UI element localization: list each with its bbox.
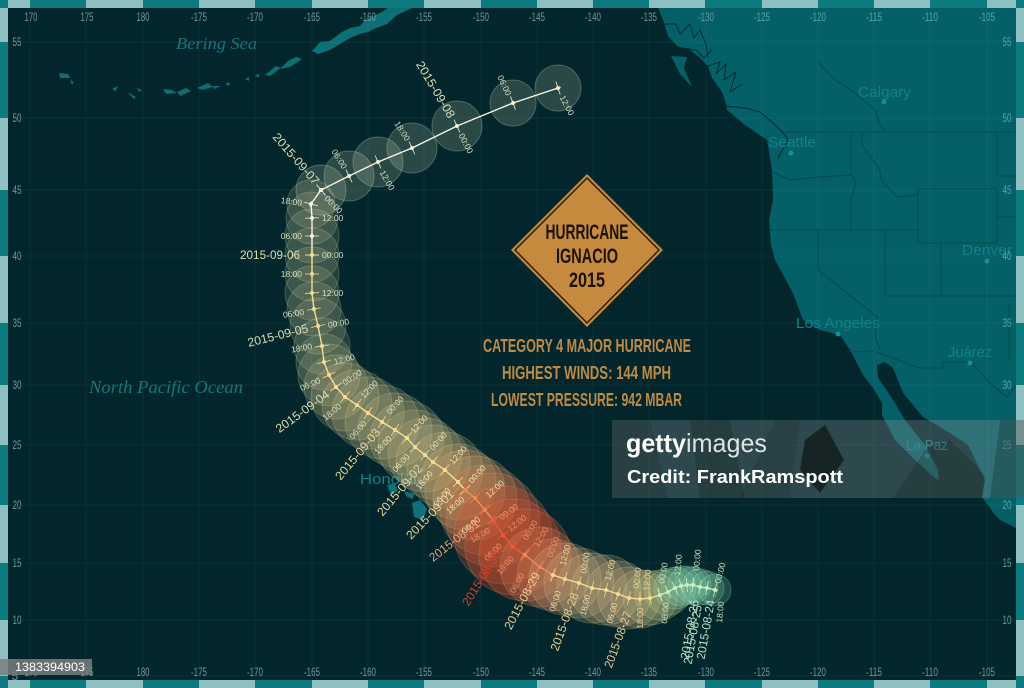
axis labels: longitude bottom: -105: [979, 665, 995, 679]
axis labels: longitude bottom: -175: [191, 665, 207, 679]
axis labels: longitude bottom: -130: [698, 665, 714, 679]
axis labels: longitude bottom: 180: [136, 665, 150, 679]
date labels along the track: 2015-08-30: [459, 548, 504, 608]
watermark credit: Credit: FrankRamspott: [627, 467, 843, 487]
axis labels: latitude right: 35: [1002, 316, 1012, 330]
storm statistics text block: CATEGORY 4 MAJOR HURRICANE: [483, 336, 691, 356]
axis labels: longitude top: -170: [247, 10, 263, 24]
time labels along the track: 06:00: [604, 601, 620, 625]
time labels along the track: 18:00: [444, 494, 467, 516]
image ID badge: [0, 659, 92, 675]
time labels along the track: 12:00: [322, 213, 344, 223]
watermark banner: [612, 420, 1024, 498]
axis labels: longitude bottom: 175: [80, 665, 94, 679]
axis labels: longitude top: -140: [585, 10, 601, 24]
date labels along the track: 2015-08-26: [678, 598, 702, 660]
time labels along the track: 06:00: [459, 514, 482, 536]
date labels along the track: 2015-09-06: [240, 248, 300, 262]
map: state and national borders: [770, 62, 1016, 397]
label: La Paz: La Paz: [906, 438, 948, 454]
time labels along the track: 06:00: [431, 485, 453, 508]
label: Calgary: Calgary: [858, 85, 912, 101]
label: Seattle: Seattle: [768, 135, 816, 151]
time labels along the track: 00:00: [520, 518, 540, 542]
axis labels: latitude left: 50: [12, 111, 22, 125]
time labels along the track: 06:00: [347, 418, 369, 441]
time labels along the track: 12:00: [358, 378, 380, 400]
time labels along the track: 06:00: [659, 602, 671, 624]
time labels along the track: 18:00: [413, 469, 435, 492]
time labels along the track: 00:00: [384, 394, 406, 416]
time labels along the track: 00:00: [457, 132, 476, 155]
time labels along the track: 00:00: [497, 501, 520, 522]
axis labels: latitude left: 55: [12, 35, 22, 49]
time labels along the track: 06:00: [298, 375, 322, 393]
land: Alaska Peninsula: [280, 8, 412, 69]
axis labels: longitude bottom: -115: [866, 665, 882, 679]
watermark logo: gettyimages: gettyimages: [626, 428, 767, 458]
sign text: Hurricane Ignacio 2015: [546, 221, 628, 292]
label: Bering Sea: Bering Sea: [176, 34, 257, 53]
time labels along the track: 00:00: [545, 535, 561, 559]
time labels along the track: 18:00: [635, 607, 645, 629]
date labels along the track: 2015-09-05: [246, 321, 310, 350]
date labels along the track: 2015-09-03: [332, 425, 384, 483]
axis labels: longitude top: -145: [529, 10, 545, 24]
time labels along the track: 06:00: [390, 451, 412, 474]
time labels along the track: 06:00: [282, 307, 305, 320]
axis labels: longitude top: [24, 10, 995, 24]
storm statistics text block: LOWEST PRESSURE: 942 MBAR: [491, 390, 682, 410]
axis labels: latitude right: 45: [1002, 183, 1012, 197]
axis labels: longitude top: -110: [922, 10, 938, 24]
axis labels: latitude left: 25: [12, 438, 22, 452]
land: Alaska inlets: [664, 24, 788, 158]
time labels along the track: 12:00: [557, 543, 573, 567]
land: Alexander Archipelago islands: [671, 56, 692, 87]
time labels along the track: 00:00: [712, 561, 728, 585]
time labels along the track: 06:00: [507, 571, 527, 595]
axis labels: longitude bottom: [24, 665, 995, 679]
axis labels: latitude right: 30: [1002, 378, 1012, 392]
date labels along the track: 2015-08-27: [601, 609, 635, 670]
time labels along the track: 12:00: [333, 352, 356, 367]
time labels along the track: 12:00: [602, 558, 618, 582]
axis labels: longitude top: -160: [360, 10, 376, 24]
axis labels: longitude top: -165: [304, 10, 320, 24]
time labels along the track: 12:00: [484, 478, 506, 500]
date labels along the track: 2015-08-31: [426, 516, 483, 564]
axis labels: longitude top: -135: [641, 10, 657, 24]
time labels along the track: 00:00: [322, 250, 344, 260]
date labels along the track: 2015-09-01: [403, 487, 457, 542]
axis labels: longitude top: -130: [698, 10, 714, 24]
axis labels: latitude left: [12, 35, 22, 683]
place labels: [88, 34, 1012, 488]
sign text: Hurricane Ignacio 2015: IGNACIO: [556, 245, 618, 268]
axis labels: longitude top: -175: [191, 10, 207, 24]
storm statistics text block: HIGHEST WINDS: 144 MPH: [502, 363, 671, 383]
sign text: Hurricane Ignacio 2015: 2015: [569, 269, 605, 292]
time labels along the track: 18:00: [578, 593, 592, 616]
label: Honolulu: Honolulu: [360, 472, 426, 488]
time labels along the track: 00:00: [466, 463, 488, 485]
hurricane track line with 6-hour tick marks: [311, 88, 715, 599]
axis labels: longitude bottom: -165: [304, 665, 320, 679]
date labels along the track: 2015-08-25: [681, 603, 705, 665]
land: Gulf of California water: [877, 362, 1016, 530]
time labels along the track: 12:00: [378, 168, 397, 192]
land: Aleutian Islands: [59, 66, 281, 99]
axis labels: latitude right: 15: [1002, 556, 1012, 570]
time labels along the track: 00:00: [327, 316, 350, 330]
time labels along the track: 12:00: [558, 94, 577, 117]
axis labels: longitude bottom: -125: [754, 665, 770, 679]
time labels along the track: 18:00: [714, 601, 726, 623]
axis labels: latitude right: 20: [1002, 498, 1012, 512]
storm statistics text block: [483, 336, 691, 410]
date labels along the track: 2015-09-04: [273, 387, 332, 436]
axis labels: longitude bottom: -120: [810, 665, 826, 679]
axis labels: latitude left: 35: [12, 316, 22, 330]
axis labels: longitude top: 180: [136, 10, 150, 24]
axis labels: latitude left: 45: [12, 183, 22, 197]
axis labels: longitude bottom: -110: [922, 665, 938, 679]
time labels along the track: 06:00: [495, 74, 514, 97]
time labels along the track: [280, 74, 728, 629]
time labels along the track: 00:00: [691, 549, 703, 571]
date labels along the track: 2015-09-07: [270, 130, 323, 188]
axis labels: longitude bottom: -160: [360, 665, 376, 679]
time labels along the track: 06:00: [329, 147, 349, 171]
axis labels: latitude right: 40: [1002, 249, 1012, 263]
date labels along the track: 2015-08-24: [694, 598, 718, 660]
axis labels: latitude right: 10: [1002, 613, 1012, 627]
axis labels: longitude bottom: -140: [585, 665, 601, 679]
axis labels: longitude top: 170: [24, 10, 38, 24]
time labels along the track: 18:00: [392, 119, 412, 143]
time labels along the track: 12:00: [408, 413, 430, 435]
time labels along the track: 06:00: [482, 541, 504, 563]
axis labels: longitude top: -115: [866, 10, 882, 24]
axis labels: longitude top: 175: [80, 10, 94, 24]
time labels along the track: 18:00: [494, 553, 516, 576]
time labels along the track: 00:00: [340, 367, 364, 387]
axis labels: latitude left: 20: [12, 498, 22, 512]
time labels along the track: 12:00: [641, 569, 653, 591]
label: Juárez: Juárez: [948, 345, 992, 361]
sign text: Hurricane Ignacio 2015: HURRICANE: [546, 221, 628, 244]
image ID badge: 1383394903: [15, 660, 85, 674]
axis labels: longitude bottom: -145: [529, 665, 545, 679]
axis labels: latitude right: [1002, 35, 1012, 627]
axis labels: latitude left: 10: [12, 613, 22, 627]
road-sign title diamond: [511, 174, 663, 327]
axis labels: longitude bottom: -155: [416, 665, 432, 679]
axis labels: longitude top: -150: [473, 10, 489, 24]
axis labels: longitude bottom: 170: [24, 665, 38, 679]
time labels along the track: 00:00: [427, 430, 449, 452]
time labels along the track: 06:00: [547, 589, 563, 613]
hurricane wind-radius circles: [285, 65, 731, 629]
time labels along the track: 18:00: [290, 341, 313, 355]
axis labels: longitude top: -155: [416, 10, 432, 24]
watermark facets: [612, 420, 1024, 498]
axis labels: latitude left: 40: [12, 249, 22, 263]
time labels along the track: 18:00: [468, 525, 492, 545]
axis labels: latitude left: 30: [12, 378, 22, 392]
land: North America: [658, 0, 1024, 528]
time labels along the track: 00:00: [578, 551, 592, 574]
time labels along the track: 12:00: [506, 512, 529, 533]
time labels along the track: 12:00: [531, 525, 551, 549]
time labels along the track: 12:00: [322, 288, 344, 298]
date labels along the track: [240, 59, 718, 670]
time labels along the track: 00:00: [656, 561, 670, 584]
time labels along the track: 18:00: [280, 195, 303, 208]
date labels along the track: 2015-09-02: [374, 461, 426, 519]
label: Denver: Denver: [962, 243, 1012, 259]
axis labels: longitude bottom: -170: [247, 665, 263, 679]
time labels along the track: 00:00: [322, 193, 345, 216]
time labels along the track: 18:00: [372, 433, 394, 456]
time labels along the track: 18:00: [522, 571, 540, 595]
axis labels: longitude top: -105: [979, 10, 995, 24]
axis labels: longitude top: -120: [810, 10, 826, 24]
time labels along the track: 18:00: [320, 401, 343, 423]
date labels along the track: 2015-08-29: [501, 569, 543, 632]
axis labels: latitude left: 15: [12, 556, 22, 570]
time labels along the track: 12:00: [447, 444, 469, 466]
time labels along the track: 00:00: [631, 567, 643, 589]
time labels along the track: 18:00: [281, 269, 302, 279]
time labels along the track: 06:00: [281, 231, 302, 241]
date labels along the track: 2015-09-08: [413, 59, 458, 121]
map: land masses: [59, 0, 1024, 530]
label: Los Angeles: Los Angeles: [796, 316, 880, 332]
axis labels: latitude right: 25: [1002, 438, 1012, 452]
axis labels: latitude right: 50: [1002, 111, 1012, 125]
land: Hawaiian Islands: [387, 483, 427, 520]
date labels along the track: 2015-08-28: [548, 590, 582, 653]
time labels along the track: 12:00: [672, 554, 684, 576]
axis labels: latitude left: 5: [12, 669, 19, 683]
axis labels: longitude bottom: -150: [473, 665, 489, 679]
label: North Pacific Ocean: North Pacific Ocean: [88, 377, 243, 397]
axis labels: latitude right: 55: [1002, 35, 1012, 49]
axis labels: longitude bottom: -135: [641, 665, 657, 679]
axis labels: longitude top: -125: [754, 10, 770, 24]
